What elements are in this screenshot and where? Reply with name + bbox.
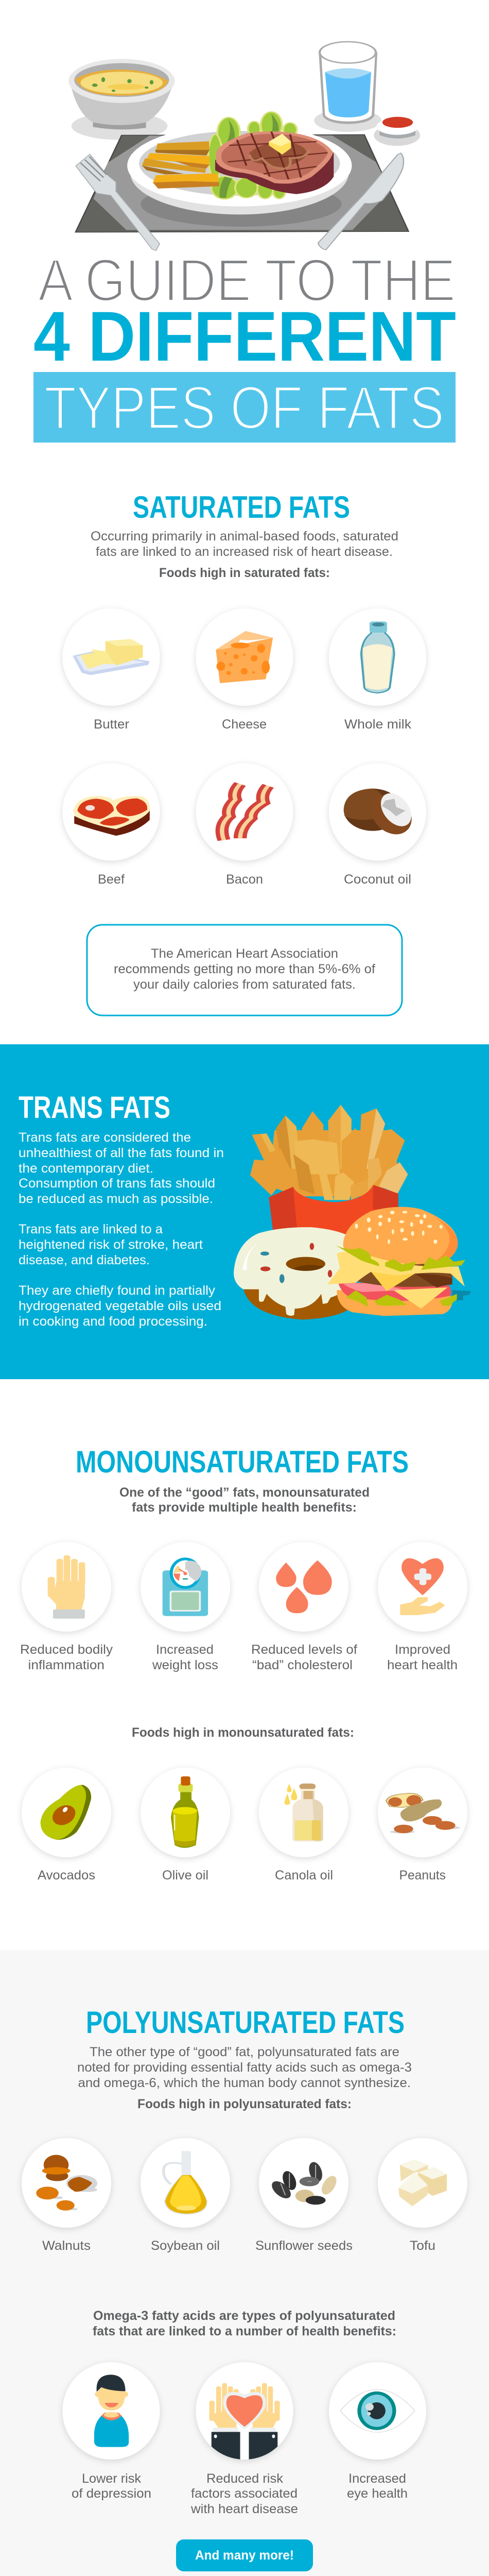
item: butter: Butter	[94, 717, 129, 732]
icon: hamburger	[327, 1207, 471, 1316]
icon: placemat	[76, 134, 409, 232]
benefit: reduced heart disease risk factors: factors associated	[191, 2486, 298, 2501]
item: sunflower seeds	[255, 2138, 353, 2253]
item: cheese: Cheese	[222, 717, 267, 732]
callout: AHA recommendation: The American Heart Association	[151, 946, 338, 961]
text: trans fats body: They are chiefly found in partially	[19, 1283, 216, 1298]
heading: trans fats: TRANS FATS	[19, 1090, 170, 1125]
benefit: increased weight loss: Increased	[156, 1642, 214, 1657]
benefit: lower risk of depression: Lower risk	[82, 2471, 141, 2486]
icon: fork	[76, 154, 160, 250]
item: coconut oil: Coconut oil	[344, 872, 411, 887]
icon: soup bowl	[68, 59, 174, 140]
benefit: reduced bad cholesterol	[251, 1542, 357, 1672]
text: trans fats body: Trans fats are considered the	[19, 1130, 191, 1145]
title: line 2: 4 DIFFERENT	[33, 297, 456, 376]
text: trans fats body: Trans fats are linked to a	[19, 1222, 163, 1236]
text: trans fats body: Consumption of trans fats should	[19, 1176, 215, 1191]
panel: saturated fats	[63, 490, 426, 1015]
callout: AHA recommendation: recommends getting no more than 5%-6% of	[114, 962, 375, 976]
panel: monounsaturated fats	[20, 1445, 467, 1883]
item: beef	[63, 764, 160, 887]
panel: polyunsaturated fats	[15, 2011, 474, 2571]
heading: polyunsaturated fats: POLYUNSATURATED FATS	[86, 2005, 405, 2040]
heading: monounsaturated fats: MONOUNSATURATED FATS	[76, 1445, 409, 1479]
item: sunflower seeds: Sunflower seeds	[255, 2239, 353, 2253]
icon: fries carton	[269, 1185, 398, 1235]
text: trans fats body: be reduced as much as possible.	[19, 1192, 213, 1206]
subheading: foods high in polyunsaturated fats: Foods high in polyunsaturated fats:	[137, 2097, 352, 2111]
icon: french fries	[250, 1105, 408, 1200]
button: and many more	[176, 2539, 313, 2571]
item: tofu: Tofu	[410, 2239, 435, 2253]
text: polyunsaturated intro: and omega-6, which the human body cannot synthesize.	[78, 2076, 411, 2090]
item: walnuts	[22, 2138, 111, 2253]
benefit: reduced heart disease risk factors: with heart disease	[190, 2502, 298, 2516]
item: walnuts: Walnuts	[42, 2239, 91, 2253]
item: canola oil	[259, 1768, 348, 1883]
text: saturated intro: fats are linked to an increased risk of heart disease.	[96, 545, 393, 559]
illustration: fries, donut and burger	[234, 1105, 471, 1319]
icon: glazed donut	[234, 1227, 353, 1319]
item: bacon: Bacon	[226, 872, 263, 887]
icon: knife	[318, 153, 404, 250]
item: butter	[63, 608, 160, 732]
text: polyunsaturated intro	[77, 2045, 412, 2090]
icon: plate with steak and fries	[127, 112, 352, 227]
panel: trans fats	[0, 1044, 489, 1379]
item: peanuts	[378, 1768, 467, 1883]
item: whole milk	[329, 608, 426, 732]
callout: AHA recommendation: your daily calories from saturated fats.	[133, 977, 356, 992]
benefit: reduced heart disease risk factors: Reduced risk	[206, 2471, 284, 2486]
item: canola oil: Canola oil	[275, 1868, 333, 1883]
benefit: increased eye health	[329, 2362, 426, 2501]
subheading: mono benefits intro: fats provide multiple health benefits:	[132, 1500, 357, 1515]
item: beef: Beef	[98, 872, 125, 887]
benefit: improved heart health: Improved	[395, 1642, 450, 1657]
subheading: mono benefits intro: One of the “good” fats, monounsaturated	[119, 1485, 370, 1500]
icon: sauce cup	[374, 117, 420, 146]
subheading: omega-3 benefits intro	[93, 2309, 396, 2338]
text: trans fats body: unhealthiest of all the fats found in	[19, 1146, 224, 1160]
item: soybean oil: Soybean oil	[151, 2239, 220, 2253]
text: trans fats body: disease, and diabetes.	[19, 1253, 150, 1267]
benefit: improved heart health: heart health	[387, 1658, 458, 1672]
subheading: omega-3 benefits intro: Omega-3 fatty acids are types of polyunsaturated	[93, 2309, 395, 2323]
item: olive oil	[141, 1768, 230, 1883]
text: saturated intro: Occurring primarily in animal-based foods, saturated	[91, 529, 398, 544]
benefit: reduced bad cholesterol: “bad” cholesterol	[252, 1658, 353, 1672]
benefit: lower risk of depression	[63, 2362, 160, 2501]
item: bacon	[196, 764, 293, 887]
item: olive oil: Olive oil	[162, 1868, 208, 1883]
benefit: reduced bodily inflammation	[20, 1542, 113, 1672]
text: polyunsaturated intro: The other type of “good” fat, polyunsaturated fats are	[90, 2045, 399, 2059]
button: and many more: And many more!	[195, 2548, 294, 2563]
item: soybean oil	[141, 2138, 230, 2253]
text: trans fats body: in cooking and food processing.	[19, 1314, 207, 1329]
item: avocados	[22, 1768, 111, 1883]
benefit: reduced bodily inflammation: inflammation	[28, 1658, 104, 1672]
text: trans fats body: hydrogenated vegetable oils used	[19, 1299, 221, 1313]
item: avocados: Avocados	[38, 1868, 95, 1883]
heading: saturated fats: SATURATED FATS	[133, 490, 350, 524]
icon: water glass	[314, 42, 381, 132]
benefit: increased weight loss: weight loss	[152, 1658, 218, 1672]
text: trans fats body: heightened risk of stroke, heart	[19, 1238, 203, 1252]
text: polyunsaturated intro: noted for providing essential fatty acids such as omega-3	[77, 2060, 412, 2075]
subheading: foods high in monounsaturated fats: Foods high in monounsaturated fats:	[132, 1725, 354, 1740]
benefit: reduced heart disease risk factors	[190, 2362, 298, 2516]
subheading: foods high in saturated fats: Foods high in saturated fats:	[159, 566, 330, 580]
benefit: reduced bad cholesterol: Reduced levels of	[251, 1642, 357, 1657]
callout: AHA recommendation	[87, 925, 402, 1015]
subheading: omega-3 benefits intro: fats that are linked to a number of health benefits:	[93, 2324, 396, 2338]
item: peanuts: Peanuts	[399, 1868, 446, 1883]
benefit: reduced bodily inflammation: Reduced bodily	[20, 1642, 113, 1657]
benefit: lower risk of depression: of depression	[72, 2486, 151, 2501]
illustration: place setting with steak meal	[68, 42, 420, 250]
item: whole milk: Whole milk	[344, 717, 412, 732]
text: trans fats body: the contemporary diet.	[19, 1161, 153, 1176]
benefit: improved heart health	[378, 1542, 467, 1672]
benefit: increased eye health: eye health	[347, 2486, 408, 2501]
text: saturated intro	[91, 529, 398, 559]
item: tofu	[378, 2138, 467, 2253]
text: trans fats body	[19, 1130, 224, 1329]
subheading: mono benefits intro	[119, 1485, 370, 1515]
item: cheese	[196, 608, 293, 732]
benefit: increased eye health: Increased	[348, 2471, 406, 2486]
item: coconut oil	[329, 764, 426, 887]
benefit: increased weight loss	[141, 1542, 230, 1672]
